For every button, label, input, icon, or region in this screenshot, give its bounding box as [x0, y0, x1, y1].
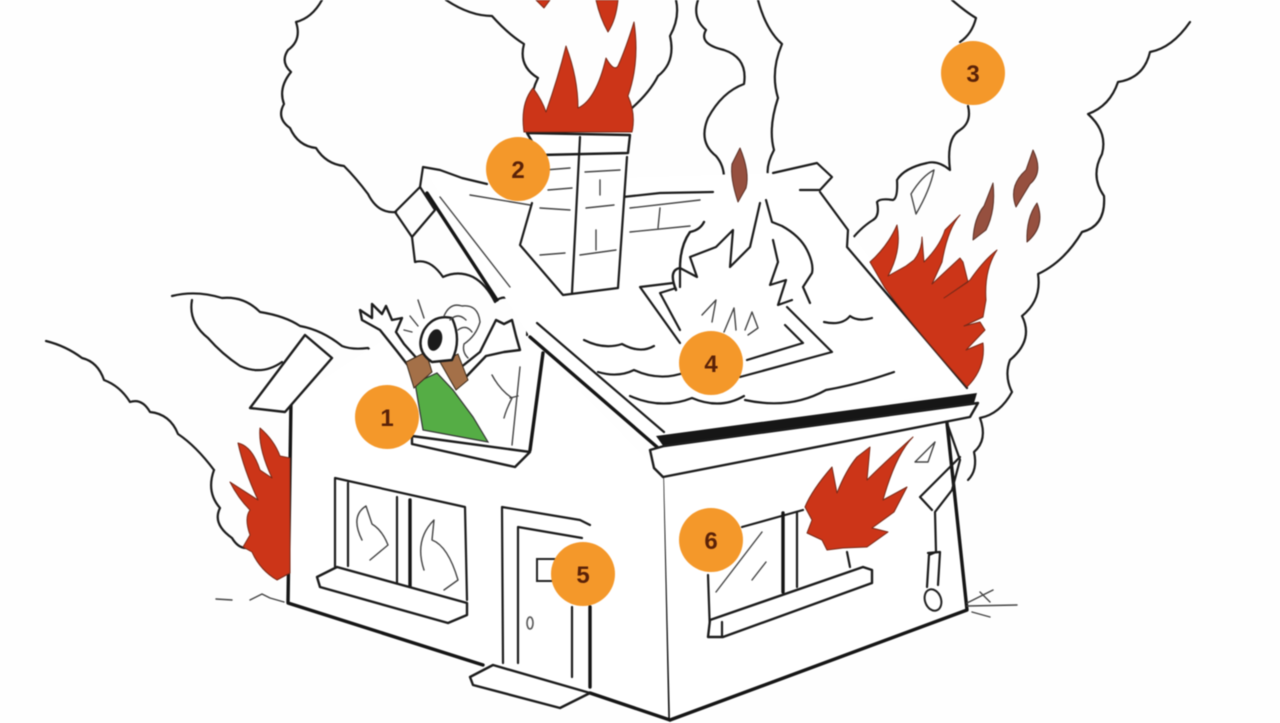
roof skylight	[640, 283, 832, 377]
white flames from skylight	[673, 148, 812, 335]
hanging figure on right wall	[915, 423, 960, 613]
roof tiles behind chimney	[630, 200, 700, 232]
badge 6: 6	[704, 528, 718, 555]
smoke: left top cloud	[46, 0, 528, 548]
badge 2	[486, 137, 550, 201]
badge 3: 3	[966, 61, 980, 88]
badge 4	[679, 331, 743, 395]
badge 4: 4	[704, 351, 718, 378]
badge 6	[679, 508, 743, 572]
house: left wall	[250, 310, 670, 720]
badge 2: 2	[511, 157, 525, 184]
smoke: centre cloud above chimney	[446, 0, 782, 192]
badge 3	[941, 41, 1005, 105]
person at window	[360, 300, 520, 442]
house: right wall	[664, 423, 967, 720]
front window	[317, 478, 467, 623]
right window	[708, 510, 872, 637]
ground tufts	[216, 590, 1017, 617]
badge 1	[355, 385, 419, 449]
smoke: right cloud	[848, 0, 1190, 480]
front door	[470, 507, 590, 708]
attic window frame	[412, 353, 543, 467]
flame: left wall	[230, 428, 290, 580]
badge 1: 1	[380, 405, 394, 432]
house: roof plane	[395, 163, 967, 447]
roof eave and gutter	[650, 393, 978, 477]
flame: chimney top	[523, 0, 636, 132]
badge 5: 5	[576, 562, 590, 589]
flame: right window	[805, 437, 913, 550]
flame: right roof edge	[870, 150, 1040, 387]
chimney	[520, 133, 630, 295]
badge 5	[551, 542, 615, 606]
